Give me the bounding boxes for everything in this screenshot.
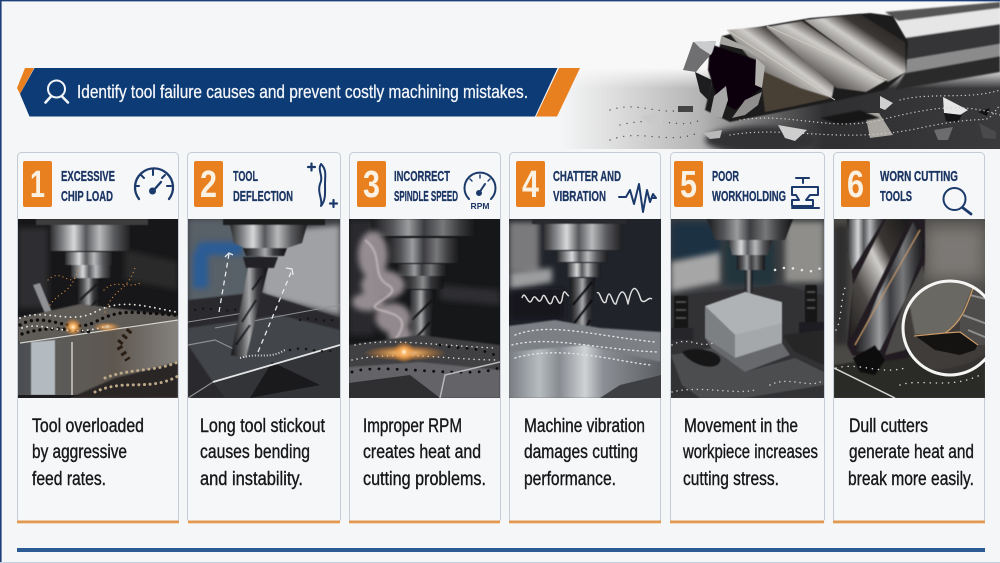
shank [885,2,1000,90]
base blocks [671,348,824,398]
description 5: cutting stress. [683,469,779,490]
clamping bolts [674,296,688,332]
speckle [730,90,1000,135]
banner blue ribbon [20,68,558,116]
description 3: creates heat and [363,442,481,463]
icon: magnifier [46,80,68,102]
heading 2: TOOL [233,169,258,185]
description 1 [32,416,144,490]
description 6: generate heat and [849,442,974,463]
description 2: Long tool stickout [200,416,326,437]
broken tip [708,44,762,110]
smoke [352,231,412,345]
number badge 3 [357,161,386,207]
photo: overloaded cutter with sparks [18,219,178,398]
heading 3: SPINDLE SPEED [394,189,458,205]
description 4: damages cutting [524,442,638,463]
heading 4: CHATTER AND [553,169,621,185]
panel: 4 chatter and vibration [509,152,661,523]
heading 2: DEFLECTION [233,189,293,205]
number badge 3: 3 [363,164,380,206]
icon: deflection [308,164,337,207]
heading 6: WORN CUTTING [880,169,958,185]
tool body [847,219,925,375]
inset magnified edge [904,282,985,374]
heading 6 [880,169,958,205]
banner heading: Identify tool failure causes and prevent costly machining mistakes. [77,81,528,102]
number badge 4 [516,161,545,207]
description 1: Tool overloaded [32,416,144,437]
plate [834,355,985,398]
heading 1: CHIP LOAD [61,189,113,205]
panel: 3 incorrect spindle speed [349,152,500,523]
number badge 5 [674,161,703,207]
description 5: workpiece increases [682,442,818,463]
description 3: Improper RPM [363,416,462,437]
banner right orange slash [536,68,580,116]
panel: 6 worn cutting tools [833,152,997,523]
description 3 [363,416,486,490]
footer rule [17,548,985,552]
number badge 1 [23,161,52,207]
fluted body [705,13,908,122]
description 2 [200,416,326,490]
description 4: performance. [524,469,616,490]
workpiece [509,320,661,398]
workpiece block [705,292,782,335]
icon: RPM gauge: RPM [470,201,490,211]
number badge 5: 5 [680,164,697,206]
icon: vise [792,178,819,208]
panel: 2 tool deflection [188,152,340,523]
description 6: break more easily. [848,469,974,490]
icon: waveform [619,184,656,212]
photo: smoke and heat at cutter [349,219,500,398]
number badge 6: 6 [847,164,864,206]
number badge 4: 4 [522,164,539,206]
heading 4 [553,169,621,205]
icon: gauge [135,168,173,199]
heading 5: POOR [712,169,739,185]
vibration waves [522,288,652,304]
icon: RPM gauge [464,173,496,211]
heading 3: INCORRECT [394,169,450,185]
photo: vise holding a workpiece [671,219,824,398]
page bottom edge [0,562,1000,563]
description 3: cutting problems. [363,469,486,490]
speckle behind [610,107,700,140]
heading 5 [712,169,786,205]
description 6: Dull cutters [849,416,928,437]
heading 2 [233,169,293,205]
banner left orange sliver [17,68,34,94]
hero image: broken end mill on a table with metal shards [560,2,1000,154]
panel: 5 poor workholding [670,152,824,523]
photo: cutter with vibration waves [509,219,661,398]
heading 1: EXCESSIVE [61,169,115,185]
deflection arrows [219,253,293,352]
description 4: Machine vibration [524,416,645,437]
chips and sparks [20,312,175,334]
heading 4: VIBRATION [553,189,606,205]
description 4 [524,416,645,490]
description 1: feed rates. [32,469,106,490]
number badge 2 [194,161,223,207]
number badge 6 [841,161,870,207]
number badge 2: 2 [200,164,217,206]
description 5: Movement in the [684,416,798,437]
photo: worn end mill with zoomed inset [834,219,997,398]
description 5 [682,416,818,490]
heading 6: TOOLS [880,189,912,205]
description 1: by aggressive [32,442,127,463]
banner [17,68,580,116]
description 6 [848,416,974,490]
workpiece [18,304,178,343]
icon: magnifier [944,188,971,214]
photo: deflecting tool with arrows [188,219,340,398]
heading 3 [394,169,458,205]
heading 5: WORKHOLDING [712,189,786,205]
description 2: and instability. [200,469,303,490]
heading 1 [61,169,115,205]
description 2: causes bending [200,442,310,463]
metal shards [648,120,663,123]
workpiece [349,335,500,398]
number badge 1: 1 [30,164,45,206]
panel: 1 excessive chip load [17,152,179,523]
